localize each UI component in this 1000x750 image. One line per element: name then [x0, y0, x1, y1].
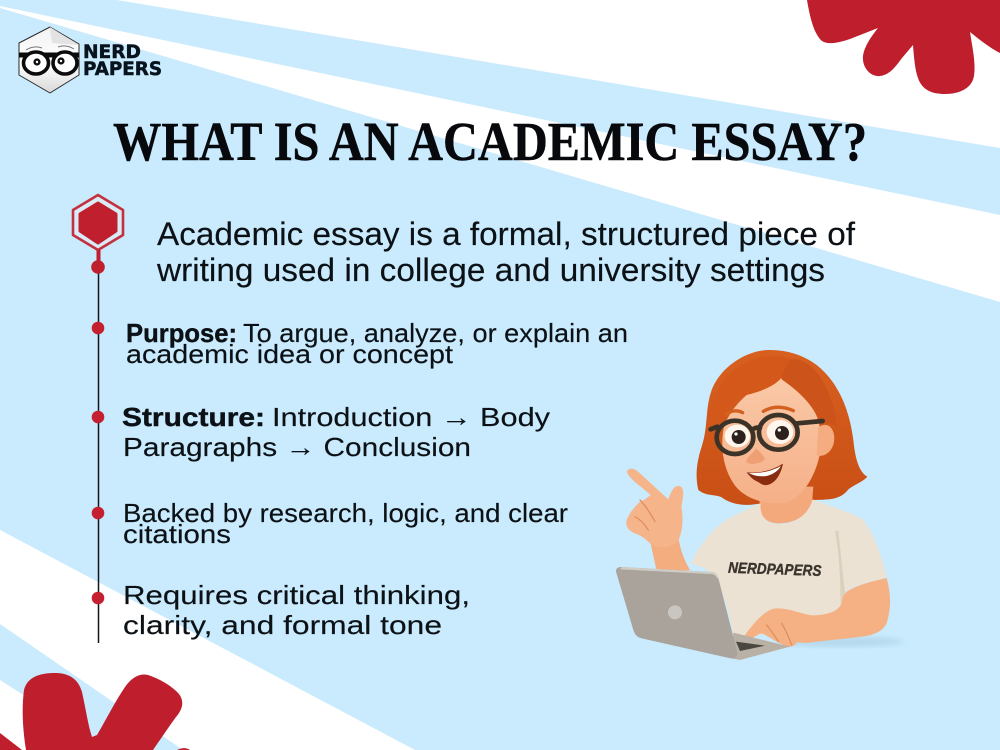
definition text	[156, 216, 855, 288]
item: backed by research: Backed by research, logic, and clear	[123, 498, 568, 528]
item: structure: Paragraphs → Conclusion	[123, 432, 471, 462]
item: structure: Structure:	[122, 402, 265, 432]
logo	[19, 27, 162, 93]
illustration: woman with laptop	[616, 350, 903, 660]
hair back	[697, 350, 867, 505]
item: critical thinking	[123, 580, 470, 640]
eyes	[725, 420, 793, 447]
item: backed by research: citations	[123, 519, 231, 549]
hair front	[708, 356, 791, 427]
logo wordmark: PAPERS	[83, 59, 162, 80]
shirt	[691, 499, 887, 635]
laptop	[616, 567, 790, 660]
left arm	[651, 537, 690, 573]
icon: top hexagon marker	[73, 195, 123, 274]
definition text: writing used in college and university settings	[156, 252, 825, 288]
item: critical thinking: clarity, and formal tone	[123, 610, 442, 640]
mouth	[747, 464, 783, 485]
eyebrows	[726, 407, 793, 414]
item: purpose	[126, 318, 628, 369]
item: structure	[122, 402, 550, 462]
face	[722, 375, 821, 503]
title: WHAT IS AN ACADEMIC ESSAY?	[113, 111, 867, 172]
right arm and typing hand	[743, 578, 890, 647]
shirt text: NERDPAPERS	[728, 560, 822, 580]
icon: nerd hexagon	[19, 27, 79, 93]
desk shadow	[777, 636, 903, 647]
logo wordmark	[83, 42, 162, 80]
nose	[746, 448, 765, 464]
neck	[759, 487, 813, 523]
pointing hand	[626, 469, 683, 547]
logo wordmark: NERD	[83, 42, 141, 63]
item: purpose: To argue, analyze, or explain an	[243, 318, 628, 348]
item: purpose: Purpose:	[126, 318, 237, 348]
ear	[817, 425, 834, 456]
timeline	[73, 195, 123, 643]
definition text: Academic essay is a formal, structured piece of	[157, 216, 855, 252]
glasses	[711, 415, 823, 454]
item: backed by research	[123, 498, 568, 549]
item: critical thinking: Requires critical thinking,	[123, 580, 470, 610]
item: structure: Introduction → Body	[272, 402, 550, 432]
item: purpose: academic idea or concept	[126, 339, 454, 369]
decorative red shape: bottom left	[0, 673, 190, 750]
decorative red shape: top right	[807, 0, 1000, 94]
marker dots	[92, 322, 104, 604]
finger creases	[635, 500, 655, 530]
